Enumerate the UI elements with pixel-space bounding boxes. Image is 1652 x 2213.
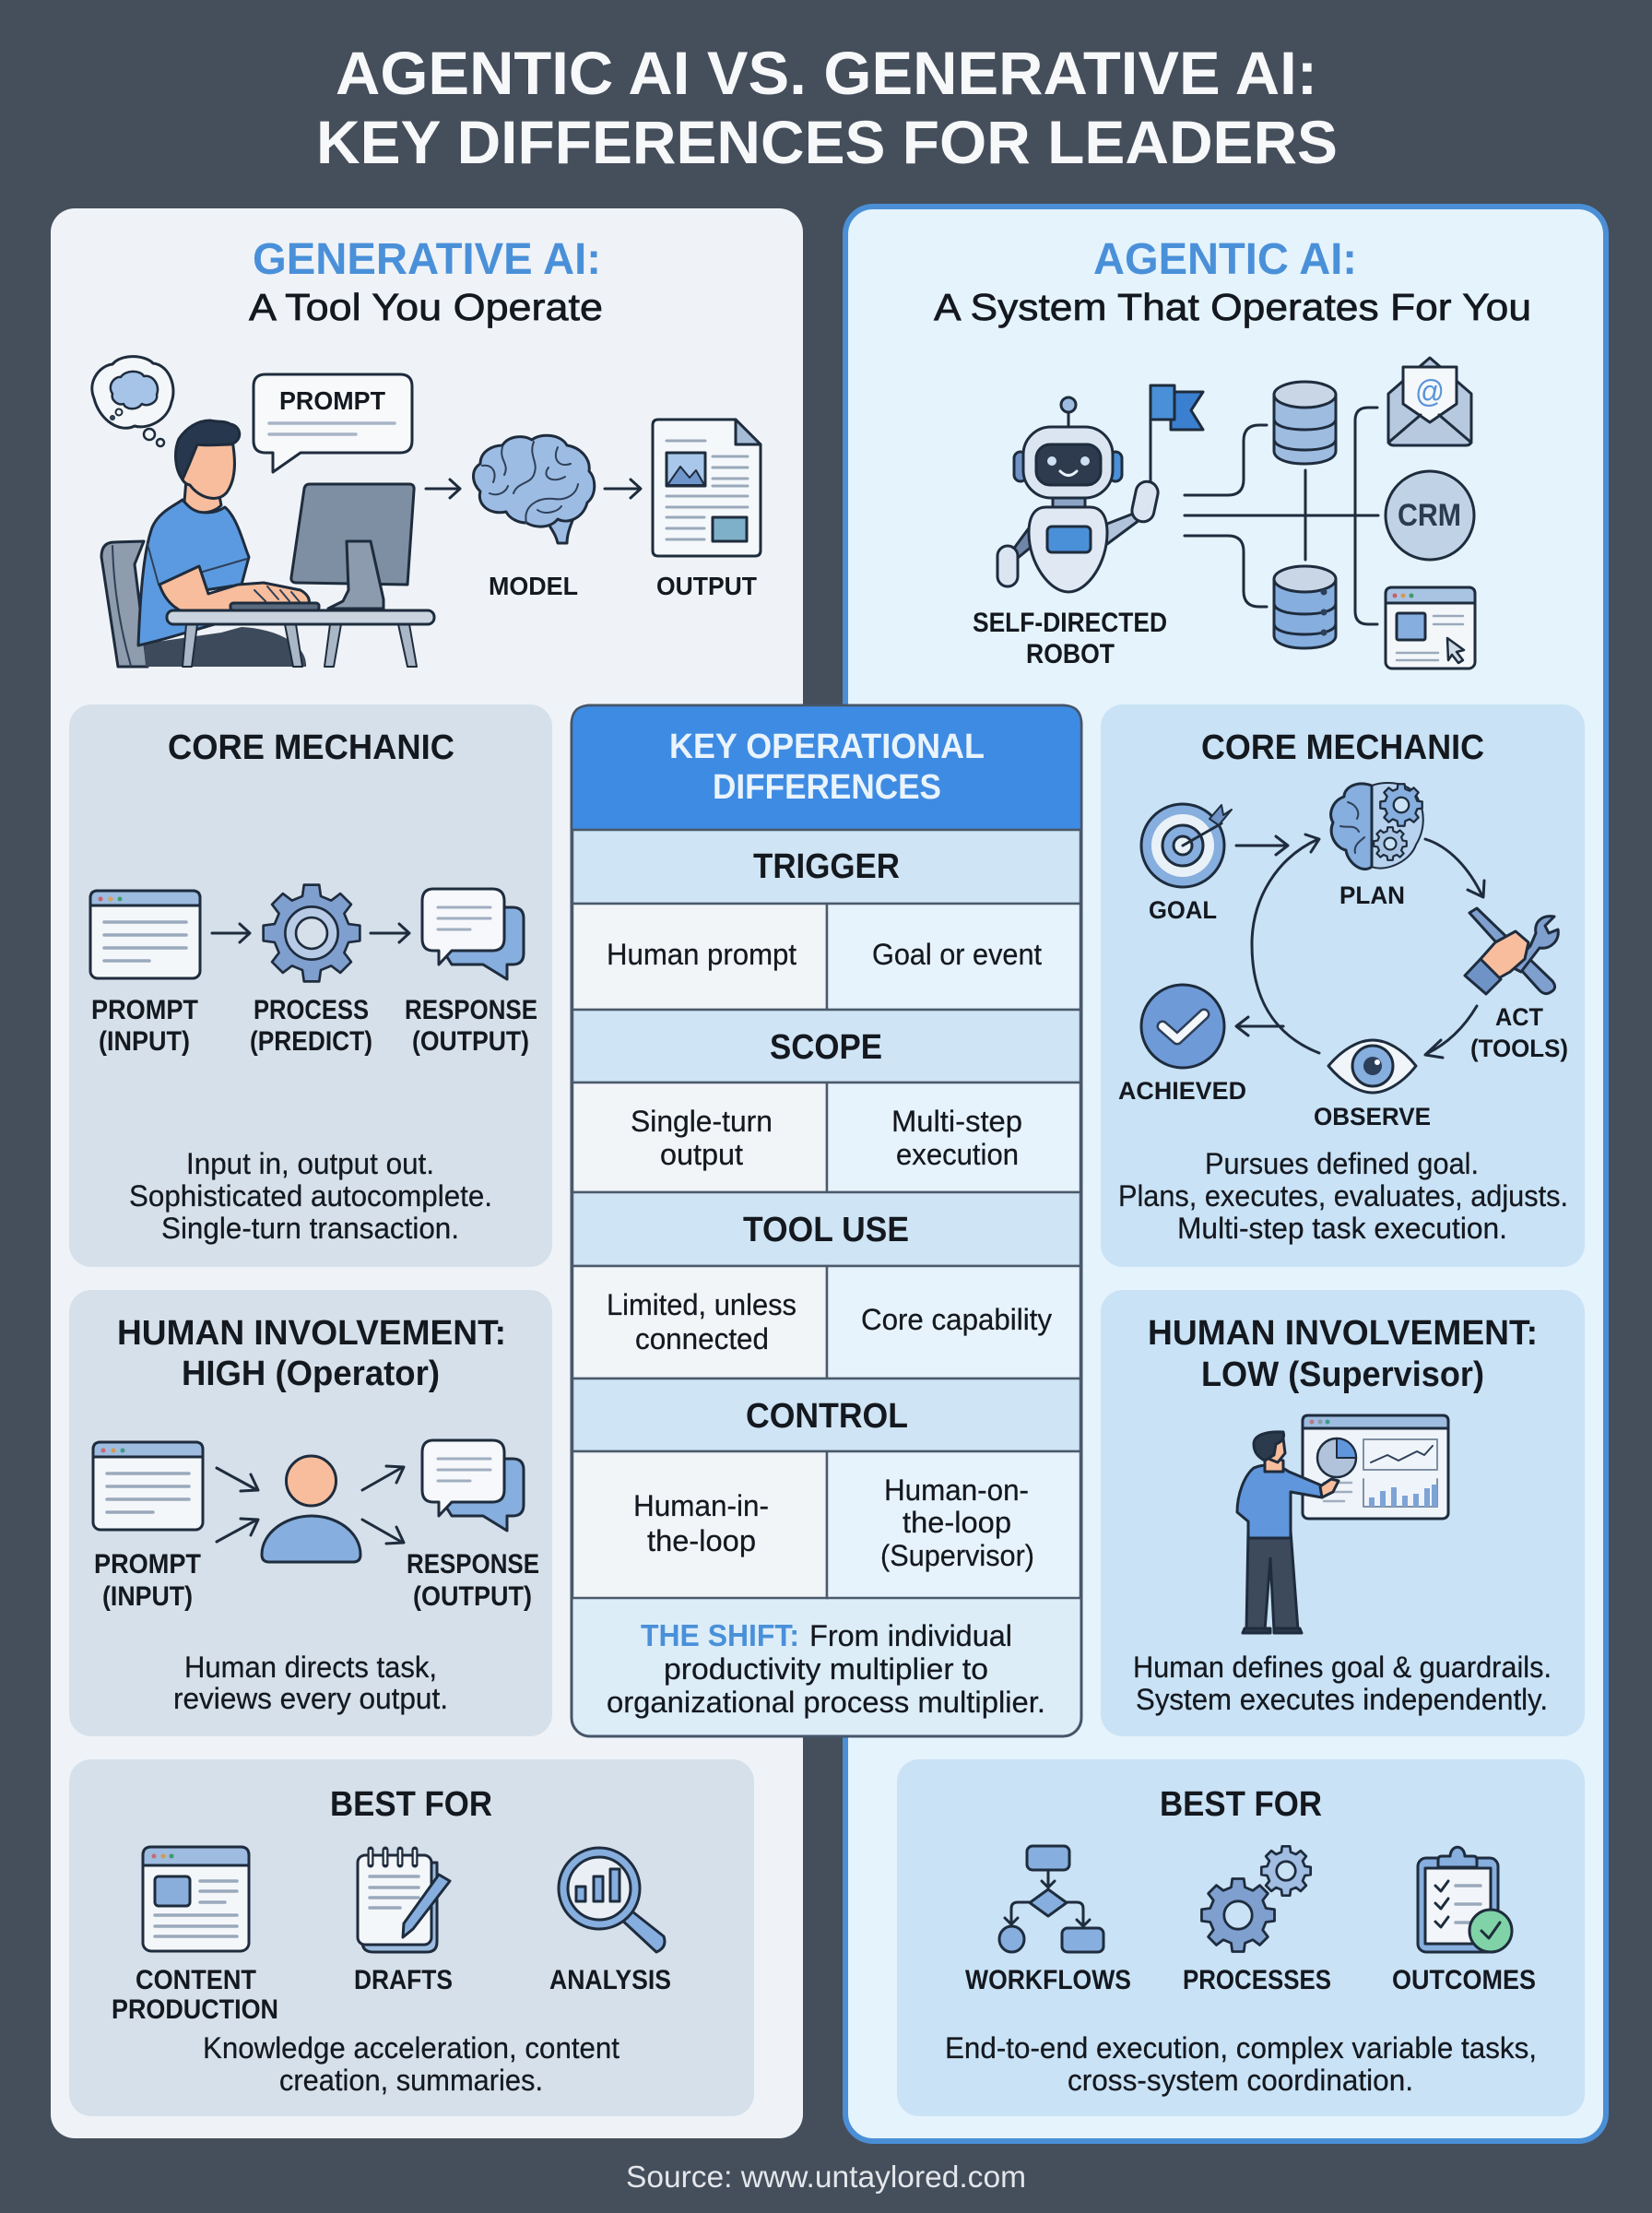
row: trigger: TRIGGER xyxy=(753,847,900,886)
row: trigger: Human prompt xyxy=(607,938,796,971)
illustration: robot and connected systems xyxy=(973,358,1475,669)
labels: OUTCOMES xyxy=(1392,1965,1536,1995)
icon: browser window with cursor xyxy=(1386,587,1475,669)
labels: WORKFLOWS xyxy=(965,1965,1131,1995)
labels: DRAFTS xyxy=(354,1965,453,1995)
text: mechanic description: Input in, output out. xyxy=(186,1147,434,1180)
arrow: model to output xyxy=(605,479,641,498)
row: control: Human-on- xyxy=(884,1473,1029,1507)
text: human description: reviews every output. xyxy=(173,1682,448,1715)
labels: mechanic steps xyxy=(91,995,537,1057)
text: best-for description xyxy=(945,2031,1537,2097)
row: trigger: Goal or event xyxy=(872,938,1042,971)
row: control: (Supervisor) xyxy=(880,1539,1034,1572)
icon: achieved check xyxy=(1141,985,1224,1068)
panel: agentic human involvement xyxy=(1101,1290,1585,1736)
arrow: to achieved xyxy=(1236,1017,1283,1035)
agentic heading xyxy=(934,235,1531,328)
icon: output document xyxy=(653,420,761,556)
label: act tools: (TOOLS) xyxy=(1470,1035,1568,1062)
text: best-for description: Knowledge acceleration, content xyxy=(203,2031,620,2065)
row: scope: output xyxy=(660,1138,743,1171)
labels xyxy=(965,1965,1536,1995)
labels: mechanic steps: (INPUT) xyxy=(99,1026,190,1057)
text: mechanic description: Multi-step task execution. xyxy=(1177,1212,1507,1245)
panel: agentic human involvement: HUMAN INVOLVEMENT: xyxy=(1148,1314,1538,1353)
callout: prompt speech bubble xyxy=(254,374,412,472)
title: AGENTIC AI VS. GENERATIVE AI: xyxy=(336,39,1317,107)
row: control: the-loop xyxy=(647,1524,756,1557)
panel: generative core mechanic xyxy=(69,704,552,1267)
labels: mechanic steps: (PREDICT) xyxy=(250,1026,372,1057)
icon: email envelope xyxy=(1388,358,1471,445)
agentic heading: A System That Operates For You xyxy=(934,286,1531,328)
text: mechanic description: Plans, executes, evaluates, adjusts. xyxy=(1118,1179,1568,1213)
panel: agentic best for xyxy=(897,1759,1585,2116)
text: human description: Human defines goal & guardrails. xyxy=(1133,1651,1552,1684)
icon: process gear xyxy=(264,885,360,981)
labels: PROMPT xyxy=(94,1549,201,1580)
icon: desk xyxy=(167,603,434,667)
arrow: cycle observe to plan xyxy=(1252,834,1319,1053)
panel: generative AI column xyxy=(51,208,803,2138)
label: goal: GOAL xyxy=(1149,896,1217,924)
icon: response bubbles xyxy=(422,1440,524,1531)
row: tool use: connected xyxy=(635,1322,769,1355)
text: mechanic description: Pursues defined goal. xyxy=(1205,1147,1479,1180)
table header xyxy=(572,705,1081,830)
text: human description: System executes independently. xyxy=(1136,1683,1548,1716)
labels: RESPONSE xyxy=(407,1549,539,1580)
row: scope: Multi-step xyxy=(891,1105,1022,1138)
text: mechanic description: Single-turn transaction. xyxy=(161,1212,459,1245)
generative heading: GENERATIVE AI: xyxy=(253,235,601,284)
panel: generative best for: BEST FOR xyxy=(330,1785,492,1824)
text: mechanic description: Sophisticated autocomplete. xyxy=(129,1179,492,1213)
label: model: MODEL xyxy=(489,572,578,600)
panel: agentic human involvement: LOW (Supervisor) xyxy=(1201,1355,1484,1394)
label: act tools: ACT xyxy=(1495,1003,1543,1031)
labels: PRODUCTION xyxy=(112,1994,278,2025)
label: output: OUTPUT xyxy=(656,572,757,600)
panel: agentic core mechanic xyxy=(1101,704,1585,1267)
labels: (OUTPUT) xyxy=(413,1581,532,1612)
row: tool use xyxy=(572,1192,1080,1379)
icon: content window xyxy=(143,1847,249,1951)
generative heading: A Tool You Operate xyxy=(249,286,603,328)
row: control xyxy=(572,1379,1080,1598)
text: human description: Human directs task, xyxy=(184,1651,437,1684)
callout: the shift: productivity multiplier to xyxy=(664,1652,988,1686)
icon: monitor xyxy=(291,484,414,609)
row: control: Human-in- xyxy=(633,1489,769,1522)
arrow xyxy=(212,924,250,942)
icon: database bottom xyxy=(1274,566,1336,648)
panel: generative human involvement: HIGH (Operator) xyxy=(182,1355,440,1393)
arrows out of person xyxy=(362,1466,404,1544)
label: plan: PLAN xyxy=(1339,882,1405,909)
labels: PROCESSES xyxy=(1183,1965,1331,1995)
labels: CONTENT xyxy=(136,1965,256,1995)
label: act tools xyxy=(1470,1003,1568,1062)
row: trigger xyxy=(572,830,1080,1010)
callout: the shift: From individual xyxy=(809,1619,1012,1652)
table header: KEY OPERATIONAL xyxy=(669,728,985,766)
row: scope xyxy=(572,1010,1080,1192)
panel: generative core mechanic: CORE MECHANIC xyxy=(168,728,454,767)
source line: Source: www.untaylored.com xyxy=(626,2160,1026,2194)
arrow: computer to model xyxy=(426,479,460,498)
generative heading xyxy=(249,235,603,328)
text: best-for description: End-to-end execution, complex variable tasks, xyxy=(945,2031,1537,2065)
icon: supervisor person xyxy=(1237,1432,1339,1633)
icon: person typing xyxy=(138,420,309,667)
text: mechanic description xyxy=(1118,1147,1568,1245)
labels: mechanic steps: PROMPT xyxy=(91,995,198,1025)
labels: mechanic steps: PROCESS xyxy=(254,995,369,1025)
text: human description xyxy=(1133,1651,1552,1716)
illustration: person at computer, model, output xyxy=(92,357,761,667)
arrow xyxy=(371,924,409,942)
icon: prompt window xyxy=(90,891,200,978)
row: tool use: Core capability xyxy=(861,1303,1052,1336)
panel: agentic best for: BEST FOR xyxy=(1160,1785,1322,1824)
table header: DIFFERENCES xyxy=(713,768,941,807)
labels: mechanic steps: RESPONSE xyxy=(405,995,537,1025)
title: KEY DIFFERENCES FOR LEADERS xyxy=(316,108,1338,176)
row: control: CONTROL xyxy=(746,1397,908,1436)
connector lines xyxy=(1185,408,1378,624)
panel: generative human involvement xyxy=(69,1290,552,1736)
callout: the shift xyxy=(607,1618,1045,1719)
icon: hand with tools xyxy=(1465,908,1558,994)
icon: observe eye xyxy=(1328,1040,1416,1093)
icon: CRM circle xyxy=(1386,471,1474,560)
label: self-directed robot: ROBOT xyxy=(1026,639,1115,669)
text: best-for description: cross-system coordination. xyxy=(1068,2064,1413,2097)
callout: prompt speech bubble: PROMPT xyxy=(279,386,385,415)
icon: magnifier with bars xyxy=(559,1848,665,1952)
row: tool use: Limited, unless xyxy=(607,1288,796,1321)
text: best-for description xyxy=(203,2031,620,2097)
icon: email envelope: @ xyxy=(1415,374,1445,409)
row: scope: SCOPE xyxy=(770,1028,882,1067)
icon: person xyxy=(262,1456,360,1562)
labels: mechanic steps: (OUTPUT) xyxy=(412,1026,529,1057)
row: tool use: TOOL USE xyxy=(743,1211,909,1249)
text: best-for description: creation, summaries. xyxy=(279,2064,543,2097)
icon: plan brain with gears xyxy=(1331,783,1423,870)
callout: the shift: THE SHIFT: xyxy=(641,1618,799,1652)
panel: generative human involvement: HUMAN INVOLVEMENT: xyxy=(117,1314,506,1353)
label: self-directed robot xyxy=(973,608,1167,669)
label: observe: OBSERVE xyxy=(1314,1103,1431,1130)
arrow: goal to plan xyxy=(1236,836,1288,855)
icon: brain xyxy=(474,435,595,543)
icon: goal target xyxy=(1141,804,1232,887)
row: scope: execution xyxy=(896,1138,1019,1171)
label: self-directed robot: SELF-DIRECTED xyxy=(973,608,1167,638)
row: scope: Single-turn xyxy=(631,1105,773,1138)
icon: robot with flag xyxy=(997,385,1203,592)
icon: CRM circle: CRM xyxy=(1398,498,1461,533)
panel: generative best for xyxy=(69,1759,754,2116)
icon: notepad and pencil xyxy=(358,1850,450,1952)
title xyxy=(316,39,1338,176)
callout: the shift: organizational process multiplier. xyxy=(607,1686,1045,1719)
icon: prompt window xyxy=(93,1442,203,1530)
labels xyxy=(112,1965,671,2025)
agentic heading: AGENTIC AI: xyxy=(1093,235,1357,284)
panel: agentic AI column xyxy=(845,207,1606,2141)
text: human description xyxy=(173,1651,448,1715)
arrow: plan to act xyxy=(1425,839,1484,897)
panel: agentic core mechanic: CORE MECHANIC xyxy=(1201,728,1484,767)
text: mechanic description xyxy=(129,1147,492,1245)
row: control: the-loop xyxy=(903,1506,1011,1539)
labels: ANALYSIS xyxy=(549,1965,671,1995)
icon: clipboard with check xyxy=(1418,1847,1512,1952)
labels: (INPUT) xyxy=(102,1581,193,1612)
labels xyxy=(94,1549,539,1612)
icon: workflow chart xyxy=(999,1846,1103,1952)
icon: response bubbles xyxy=(422,889,524,979)
icon: process gears xyxy=(1201,1846,1311,1952)
icon: dashboard screen xyxy=(1303,1415,1448,1519)
label: achieved: ACHIEVED xyxy=(1118,1077,1246,1105)
panel: key operational differences table xyxy=(572,705,1081,1736)
icon: thought bubble xyxy=(92,357,173,446)
arrow: act to observe xyxy=(1425,1006,1477,1058)
icon: database top xyxy=(1274,382,1336,464)
icon: chair xyxy=(101,541,148,667)
arrows into person xyxy=(217,1468,258,1542)
